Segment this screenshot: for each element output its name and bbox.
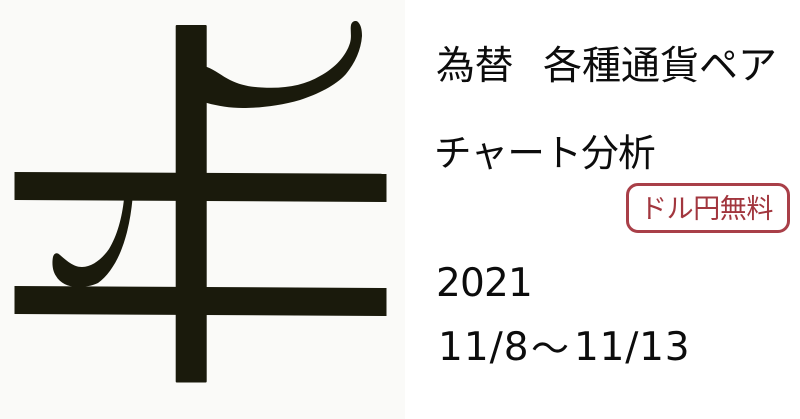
icon: stylised character glyph <box>14 21 386 382</box>
text: date range: 11/8 <box>438 325 530 370</box>
text: date range: ～ <box>531 318 569 373</box>
text: date range: 11/13 <box>574 325 690 370</box>
upper horizontal stroke <box>14 172 386 202</box>
heading: exchange currency pairs: 為替 <box>436 45 513 88</box>
vertical stroke <box>176 25 207 382</box>
badge: USD JPY free <box>626 183 790 233</box>
lower curved hook stroke <box>52 199 132 287</box>
lower horizontal stroke <box>14 286 386 316</box>
text: date range <box>438 318 690 373</box>
badge label: ドル円無料 <box>640 194 773 224</box>
text: year: 2021 <box>436 261 532 306</box>
heading: various currency pairs: 各種通貨ペア <box>543 45 777 88</box>
heading: chart analysis: チャート分析 <box>434 132 655 174</box>
panel: calligraphic logo <box>14 21 386 382</box>
upper curved flag stroke <box>200 21 362 108</box>
